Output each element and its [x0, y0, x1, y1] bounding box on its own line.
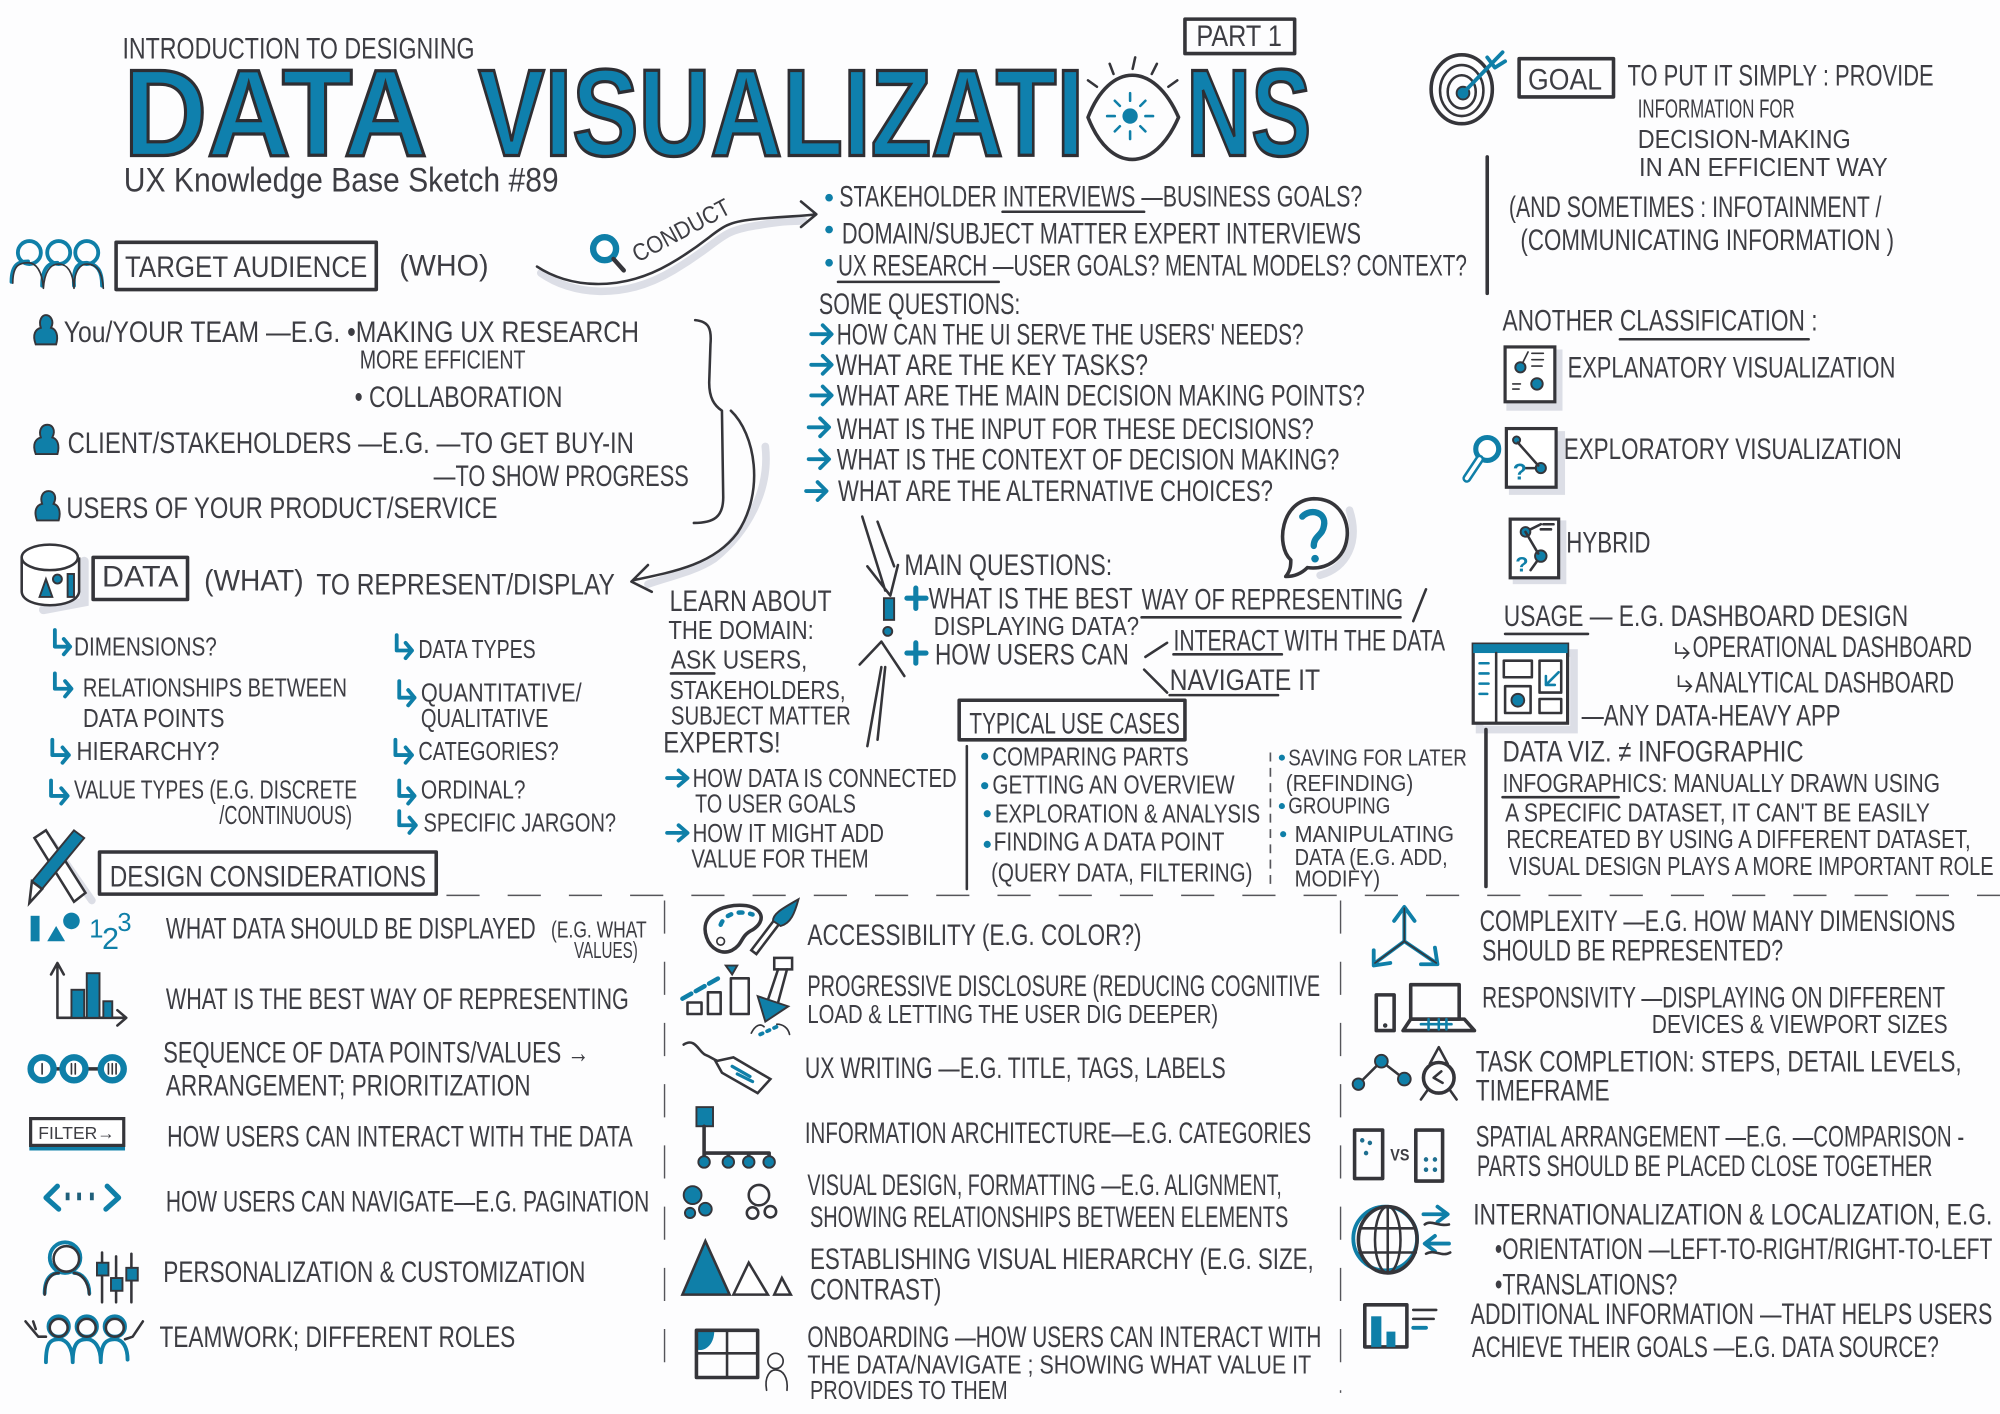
learn about the domain: SUBJECT MATTER [671, 702, 851, 730]
column 1: design considerations [26, 909, 649, 1362]
data list right: SPECIFIC JARGON? [423, 810, 616, 838]
title [124, 45, 1311, 183]
icon: filter button [29, 1119, 125, 1150]
classification heading: ANOTHER CLASSIFICATION : [1503, 304, 1818, 337]
column 2: design considerations: PROGRESSIVE DISCLOSURE (REDUCING COGNITIVE [807, 970, 1320, 1003]
column 3: design considerations [1353, 905, 1992, 1364]
typical use cases: EXPLORATION & ANALYSIS [995, 801, 1260, 829]
audience text 2: CLIENT/STAKEHOLDERS —E.G. —TO GET BUY-IN [68, 427, 634, 460]
panel: data: (WHAT) [204, 565, 304, 598]
audience text 1: • COLLABORATION [355, 381, 563, 414]
goal text [1487, 59, 1934, 293]
data list left: RELATIONSHIPS BETWEEN [83, 674, 347, 702]
learn about the domain: HOW DATA IS CONNECTED [693, 765, 957, 793]
infographic comparison [1486, 730, 1994, 886]
icon: triangles [682, 1241, 791, 1295]
heading: design considerations [100, 852, 436, 894]
title: NS [1186, 45, 1311, 183]
panel: classification [1467, 304, 1902, 580]
goal text: DECISION-MAKING [1638, 126, 1851, 154]
typical use cases: GETTING AN OVERVIEW [992, 771, 1235, 799]
icon: bars and shovel [682, 958, 792, 1034]
icon: data shapes and numbers: 1 [89, 915, 103, 943]
typical use cases: FINDING A DATA POINT [994, 829, 1224, 857]
brace [694, 320, 723, 523]
some questions: HOW CAN THE UI SERVE THE USERS' NEEDS? [837, 318, 1304, 351]
panel: target audience: (WHO) [399, 250, 489, 283]
icon: hybrid document: ? [1515, 551, 1529, 576]
icon: dashboard [1473, 644, 1574, 730]
title: VISUALIZATI [478, 45, 1084, 183]
research methods list [825, 181, 1467, 283]
main questions text: WHAT IS THE BEST [929, 582, 1133, 615]
icon: pagination [46, 1186, 119, 1209]
data list left: /CONTINUOUS) [219, 802, 352, 830]
column 2: design considerations: ONBOARDING —HOW USERS CAN INTERACT WITH [807, 1321, 1321, 1354]
some questions: WHAT ARE THE ALTERNATIVE CHOICES? [838, 475, 1273, 508]
icon: people group [12, 241, 103, 288]
icon: exclamation with arrows [860, 517, 904, 746]
panel: design considerations [29, 830, 2000, 1393]
main questions text: NAVIGATE IT [1170, 664, 1320, 697]
panel: classification: EXPLANATORY VISUALIZATION [1568, 352, 1895, 385]
icon: three axes [1374, 907, 1437, 966]
icon: question bubble [1283, 499, 1353, 577]
typical use cases: (REFINDING) [1286, 770, 1413, 796]
column 1: design considerations: PERSONALIZATION & CUSTOMIZATION [163, 1256, 585, 1289]
icon: target [1431, 52, 1505, 124]
icon: data shapes and numbers: 3 [117, 909, 132, 937]
icon: person 1 [34, 315, 57, 344]
typical use cases [959, 700, 1467, 891]
heading: target audience [116, 242, 376, 290]
icon: magnifier conduct [593, 237, 624, 270]
main questions text [904, 549, 1445, 697]
column 2: design considerations [682, 899, 1321, 1405]
research methods list: DOMAIN/SUBJECT MATTER EXPERT INTERVIEWS [842, 218, 1361, 251]
main questions text: MAIN QUESTIONS: [904, 549, 1112, 582]
column 2: design considerations: SHOWING RELATIONSHIPS BETWEEN ELEMENTS [810, 1201, 1288, 1234]
heading: data: DATA [102, 561, 179, 594]
panel: classification: HYBRID [1566, 526, 1650, 559]
data list left: VALUE TYPES (E.G. DISCRETE [74, 776, 357, 804]
column 2: design considerations: UX WRITING —E.G. TITLE, TAGS, LABELS [805, 1052, 1226, 1085]
data list right [395, 635, 616, 838]
column 3: design considerations: •TRANSLATIONS? [1495, 1269, 1677, 1302]
learn about the domain: HOW IT MIGHT ADD [693, 820, 884, 848]
icon: explanatory document [1505, 347, 1559, 407]
usage text [1504, 600, 1972, 733]
icon: spatial comparison [1355, 1130, 1443, 1181]
heading: goal: GOAL [1528, 63, 1602, 96]
column 1: design considerations: ARRANGEMENT; PRIORITIZATION [166, 1070, 531, 1103]
icon: data shapes and numbers [31, 909, 132, 956]
icon: person 2 [34, 425, 58, 454]
research methods list: UX RESEARCH —USER GOALS? MENTAL MODELS? CONTEXT? [838, 250, 1467, 283]
header [122, 19, 1311, 199]
icon: spatial comparison: VS [1390, 1146, 1409, 1165]
subtitle: UX Knowledge Base Sketch #89 [124, 161, 559, 199]
usage text: —ANY DATA-HEAVY APP [1582, 700, 1841, 733]
panel: goal [1431, 52, 1934, 293]
column 1: design considerations: SEQUENCE OF DATA POINTS/VALUES → [163, 1036, 589, 1069]
typical use cases: GROUPING [1288, 793, 1390, 819]
icon: chart with notes [1365, 1305, 1436, 1347]
data list right: DATA TYPES [418, 636, 536, 664]
learn about the domain: THE DOMAIN: [668, 617, 814, 645]
learn about the domain: ASK USERS, [671, 646, 807, 674]
arrow: conduct [537, 202, 816, 291]
learn about the domain: TO USER GOALS [695, 790, 856, 818]
column 2: design considerations: CONTRAST) [810, 1274, 941, 1307]
icon: hierarchy [696, 1107, 775, 1168]
audience text 2 [68, 427, 689, 493]
panel: target audience [12, 241, 766, 592]
some questions: SOME QUESTIONS: [819, 288, 1020, 321]
column 3: design considerations: SHOULD BE REPRESENTED? [1482, 934, 1783, 967]
icon: pencil and ruler [29, 830, 92, 903]
label: conduct: CONDUCT [628, 194, 735, 268]
main questions text: HOW USERS CAN [935, 639, 1129, 672]
main questions text: WAY OF REPRESENTING [1142, 584, 1403, 617]
icon: exploratory document: ? [1513, 459, 1527, 485]
icon: database [22, 545, 84, 610]
data list right: ORDINAL? [421, 776, 526, 804]
panel: classification: EXPLORATORY VISUALIZATION [1564, 433, 1902, 466]
tag: part 1: PART 1 [1196, 20, 1282, 53]
panel: research [537, 181, 1467, 508]
panel: data: TO REPRESENT/DISPLAY [316, 568, 615, 601]
data list right: QUALITATIVE [421, 705, 548, 733]
icon: data shapes and numbers: 2 [102, 922, 119, 956]
panel: usage [1473, 600, 1994, 886]
icon: bar chart [51, 963, 126, 1025]
column 2: design considerations: LOAD & LETTING THE USER DIG DEEPER) [807, 1001, 1218, 1029]
heading: target audience: TARGET AUDIENCE [125, 251, 367, 284]
learn about the domain: STAKEHOLDERS, [670, 677, 846, 705]
column 1: design considerations: VALUES) [574, 937, 638, 963]
separators [446, 895, 2000, 1393]
audience text 1: MORE EFFICIENT [360, 347, 526, 375]
title: DATA [124, 45, 427, 183]
column 2: design considerations: PROVIDES TO THEM [810, 1377, 1008, 1405]
panel: main questions [663, 499, 1467, 891]
kicker: INTRODUCTION TO DESIGNING [122, 33, 475, 66]
column 3: design considerations: DEVICES & VIEWPORT SIZES [1652, 1011, 1948, 1039]
audience text 1 [64, 316, 639, 414]
icon: steps and clock [1353, 1047, 1457, 1099]
column 2: design considerations: INFORMATION ARCHITECTURE—E.G. CATEGORIES [805, 1117, 1311, 1150]
typical use cases: COMPARING PARTS [992, 743, 1189, 771]
goal text: INFORMATION FOR [1638, 95, 1795, 123]
typical use cases: (QUERY DATA, FILTERING) [991, 859, 1253, 887]
icon: team [26, 1316, 143, 1362]
data list right: CATEGORIES? [418, 738, 559, 766]
icon: grouped circles [684, 1185, 776, 1219]
icon: hybrid document [1510, 519, 1562, 580]
column 1: design considerations: WHAT IS THE BEST WAY OF REPRESENTING [166, 983, 629, 1016]
column 1: design considerations: TEAMWORK; DIFFERENT ROLES [159, 1321, 515, 1354]
data list right: QUANTITATIVE/ [421, 680, 582, 708]
column 3: design considerations: TIMEFRAME [1476, 1075, 1610, 1108]
typical use cases: TYPICAL USE CASES [969, 707, 1180, 740]
column 2: design considerations: ACCESSIBILITY (E.G. COLOR?) [807, 919, 1142, 952]
column 1: design considerations: (E.G. WHAT [551, 916, 647, 942]
typical use cases: MANIPULATING [1295, 821, 1454, 847]
column 1: design considerations: HOW USERS CAN INTERACT WITH THE DATA [167, 1121, 633, 1154]
typical use cases: MODIFY) [1295, 865, 1380, 891]
audience text 1: You/YOUR TEAM —E.G. •MAKING UX RESEARCH [64, 316, 639, 349]
learn about the domain [663, 585, 957, 873]
audience text 3: USERS OF YOUR PRODUCT/SERVICE [66, 492, 497, 525]
heading: design considerations: DESIGN CONSIDERATIONS [110, 860, 426, 893]
icon: sequence of points [31, 1057, 124, 1080]
typical use cases: DATA (E.G. ADD, [1295, 844, 1448, 870]
column 1: design considerations: HOW USERS CAN NAVIGATE—E.G. PAGINATION [166, 1186, 649, 1219]
icon: phone and laptop [1376, 985, 1474, 1031]
infographic comparison: DATA VIZ. ≠ INFOGRAPHIC [1503, 735, 1804, 768]
column 1: design considerations: WHAT DATA SHOULD BE DISPLAYED [166, 913, 536, 946]
icon: person and sliders [45, 1242, 138, 1302]
icon: magnifier [1467, 437, 1499, 478]
goal text: (COMMUNICATING INFORMATION ) [1520, 224, 1894, 257]
icon: exploratory document [1506, 429, 1561, 491]
learn about the domain: LEARN ABOUT [670, 585, 832, 618]
some questions: WHAT ARE THE MAIN DECISION MAKING POINTS? [837, 380, 1365, 413]
main questions text: INTERACT WITH THE DATA [1173, 624, 1445, 657]
research methods list: STAKEHOLDER INTERVIEWS —BUSINESS GOALS? [839, 181, 1362, 214]
column 2: design considerations: THE DATA/NAVIGATE ; SHOWING WHAT VALUE IT [807, 1352, 1311, 1380]
icon: eye [1088, 57, 1179, 159]
main questions text: DISPLAYING DATA? [934, 613, 1139, 641]
icon: person 3 [35, 491, 60, 520]
icon: palette and brush [705, 899, 798, 954]
some questions: WHAT IS THE INPUT FOR THESE DECISIONS? [837, 413, 1314, 446]
column 2: design considerations: VISUAL DESIGN, FORMATTING —E.G. ALIGNMENT, [807, 1169, 1282, 1202]
arrow: to data [631, 411, 766, 592]
goal text: IN AN EFFICIENT WAY [1639, 154, 1888, 182]
icon: globe and direction arrows [1353, 1207, 1450, 1273]
learn about the domain: VALUE FOR THEM [691, 845, 869, 873]
some questions [806, 288, 1365, 508]
some questions: WHAT ARE THE KEY TASKS? [835, 349, 1148, 382]
icon: filter button: FILTER→ [38, 1123, 115, 1143]
data list left: HIERARCHY? [77, 738, 219, 766]
some questions: WHAT IS THE CONTEXT OF DECISION MAKING? [837, 443, 1339, 476]
panel: data [22, 545, 616, 838]
data list left: DATA POINTS [83, 705, 225, 733]
learn about the domain: EXPERTS! [663, 727, 781, 760]
audience text 2: —TO SHOW PROGRESS [434, 460, 689, 493]
heading: data [93, 557, 188, 599]
icon: onboarding window [696, 1330, 787, 1390]
icon: tag [684, 1042, 770, 1093]
column 2: design considerations: ESTABLISHING VISUAL HIERARCHY (E.G. SIZE, [810, 1243, 1314, 1276]
data list left [51, 630, 357, 830]
typical use cases: SAVING FOR LATER [1288, 744, 1467, 770]
data list left: DIMENSIONS? [74, 634, 217, 662]
